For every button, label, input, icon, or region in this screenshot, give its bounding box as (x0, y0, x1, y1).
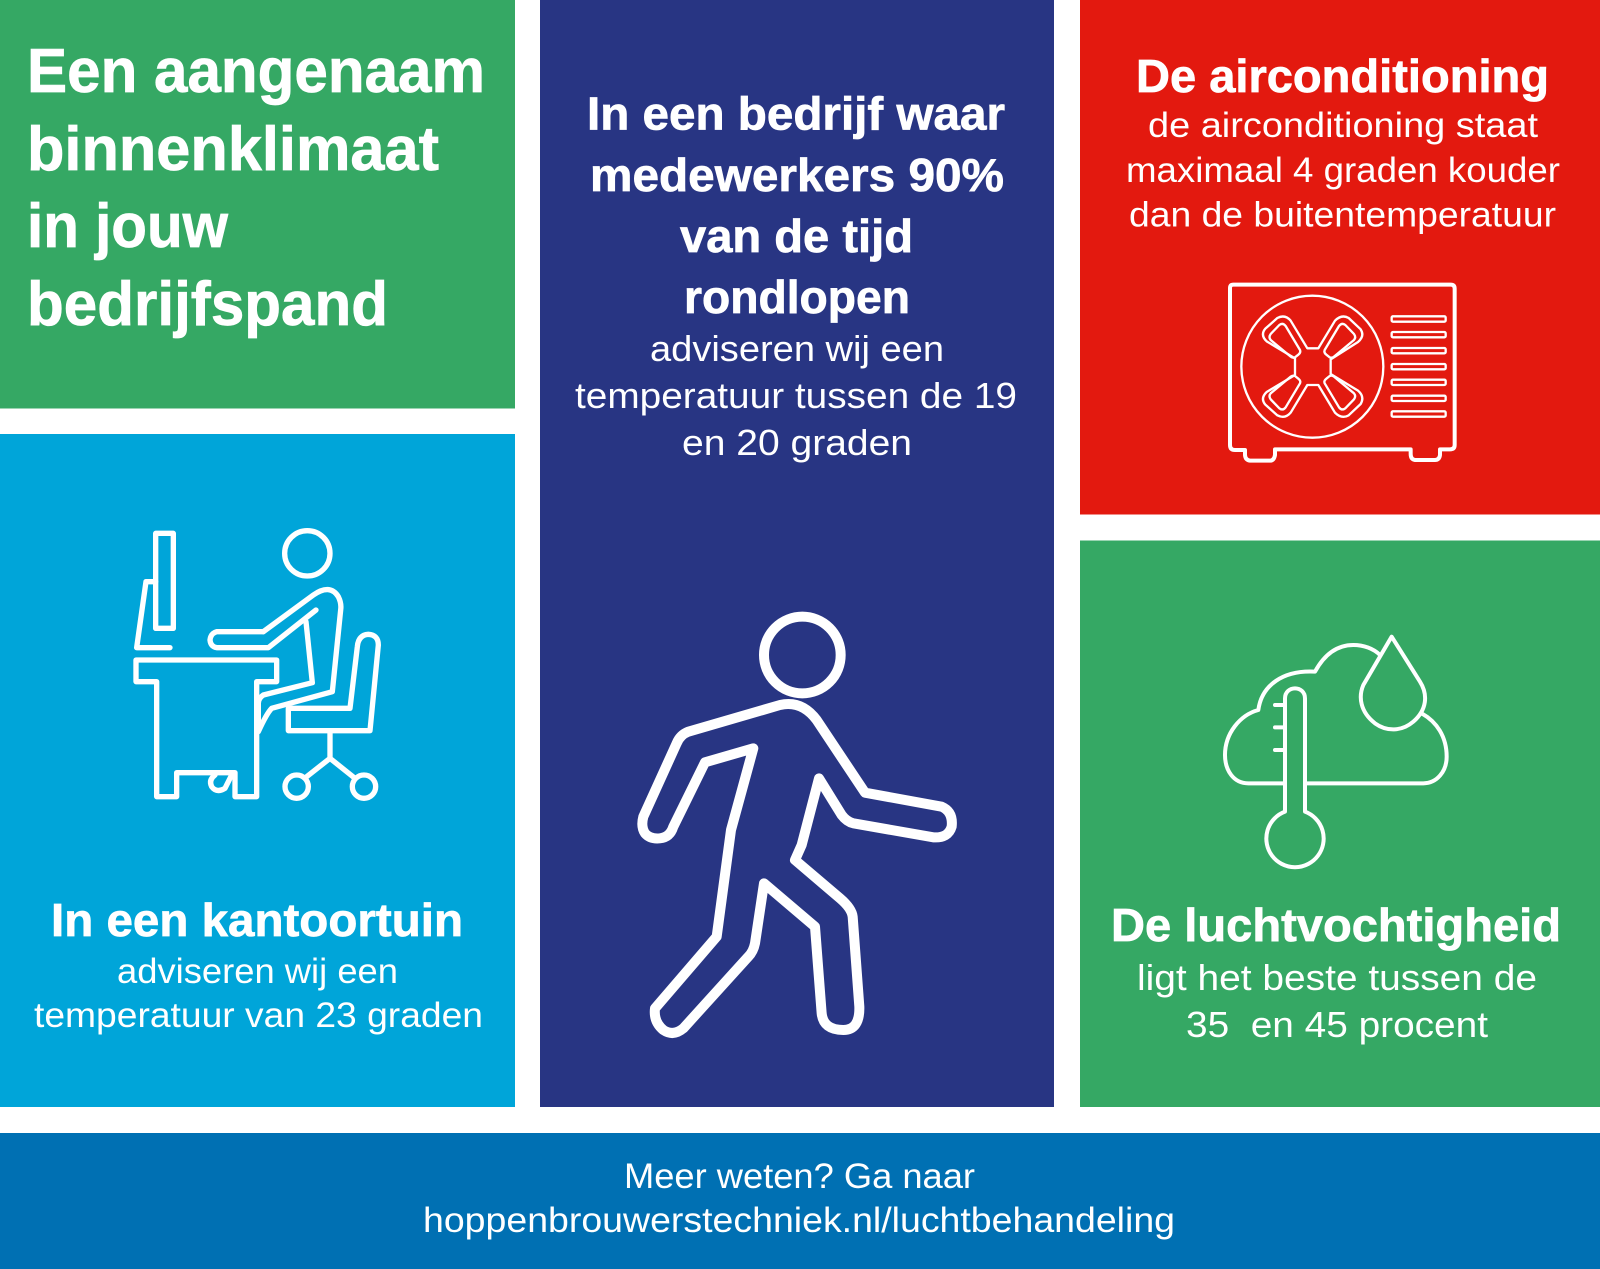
panel: bedrijf (540, 0, 1054, 1107)
text: airconditioning advice: dan de buitentemperatuur (1129, 196, 1556, 234)
heading: bedrijf: rondlopen (684, 271, 910, 323)
heading: title: bedrijfspand (27, 270, 388, 339)
panel: footer (0, 1133, 1600, 1269)
heading: title: binnenklimaat (27, 115, 439, 184)
text: footer link: Meer weten? Ga naar (624, 1157, 975, 1196)
text: bedrijf advice (575, 328, 1017, 463)
icon: airconditioning unit (1230, 285, 1455, 461)
text: airconditioning advice: maximaal 4 graden kouder (1126, 151, 1560, 190)
heading: title: in jouw (27, 192, 229, 261)
heading: bedrijf: medewerkers 90% (590, 149, 1004, 201)
text: kantoortuin advice: temperatuur van 23 graden (34, 996, 483, 1035)
heading: airconditioning: De airconditioning (1136, 50, 1549, 102)
text: footer link: hoppenbrouwerstechniek.nl/luchtbehandeling (423, 1201, 1175, 1240)
panel: luchtvochtigheid (1080, 540, 1600, 1107)
text: bedrijf advice: adviseren wij een (650, 328, 944, 369)
heading: kantoortuin: In een kantoortuin (51, 894, 463, 946)
heading: bedrijf: In een bedrijf waar (587, 88, 1005, 140)
text: footer link (423, 1157, 1175, 1240)
text: luchtvochtigheid advice: 35 en 45 procent (1186, 1004, 1488, 1045)
icon: person at desk (136, 531, 378, 798)
panel: title (0, 0, 515, 408)
text: kantoortuin advice (34, 952, 483, 1035)
heading: title (27, 37, 485, 339)
icon: walking person (642, 617, 952, 1033)
text: luchtvochtigheid advice (1137, 957, 1537, 1045)
text: airconditioning advice: de airconditioning staat (1148, 106, 1538, 145)
heading: title: Een aangenaam (27, 37, 485, 106)
text: bedrijf advice: en 20 graden (682, 422, 912, 463)
text: kantoortuin advice: adviseren wij een (117, 952, 398, 991)
text: luchtvochtigheid advice: ligt het beste tussen de (1137, 957, 1537, 998)
text: bedrijf advice: temperatuur tussen de 19 (575, 375, 1017, 416)
heading: bedrijf: van de tijd (680, 210, 913, 262)
heading: bedrijf (587, 88, 1005, 323)
panel: airconditioning (1080, 0, 1600, 514)
panel: kantoortuin (0, 434, 515, 1107)
icon: cloud, thermometer and water drop (1225, 637, 1447, 867)
text: airconditioning advice (1126, 106, 1560, 234)
heading: luchtvochtigheid: De luchtvochtigheid (1111, 899, 1561, 951)
